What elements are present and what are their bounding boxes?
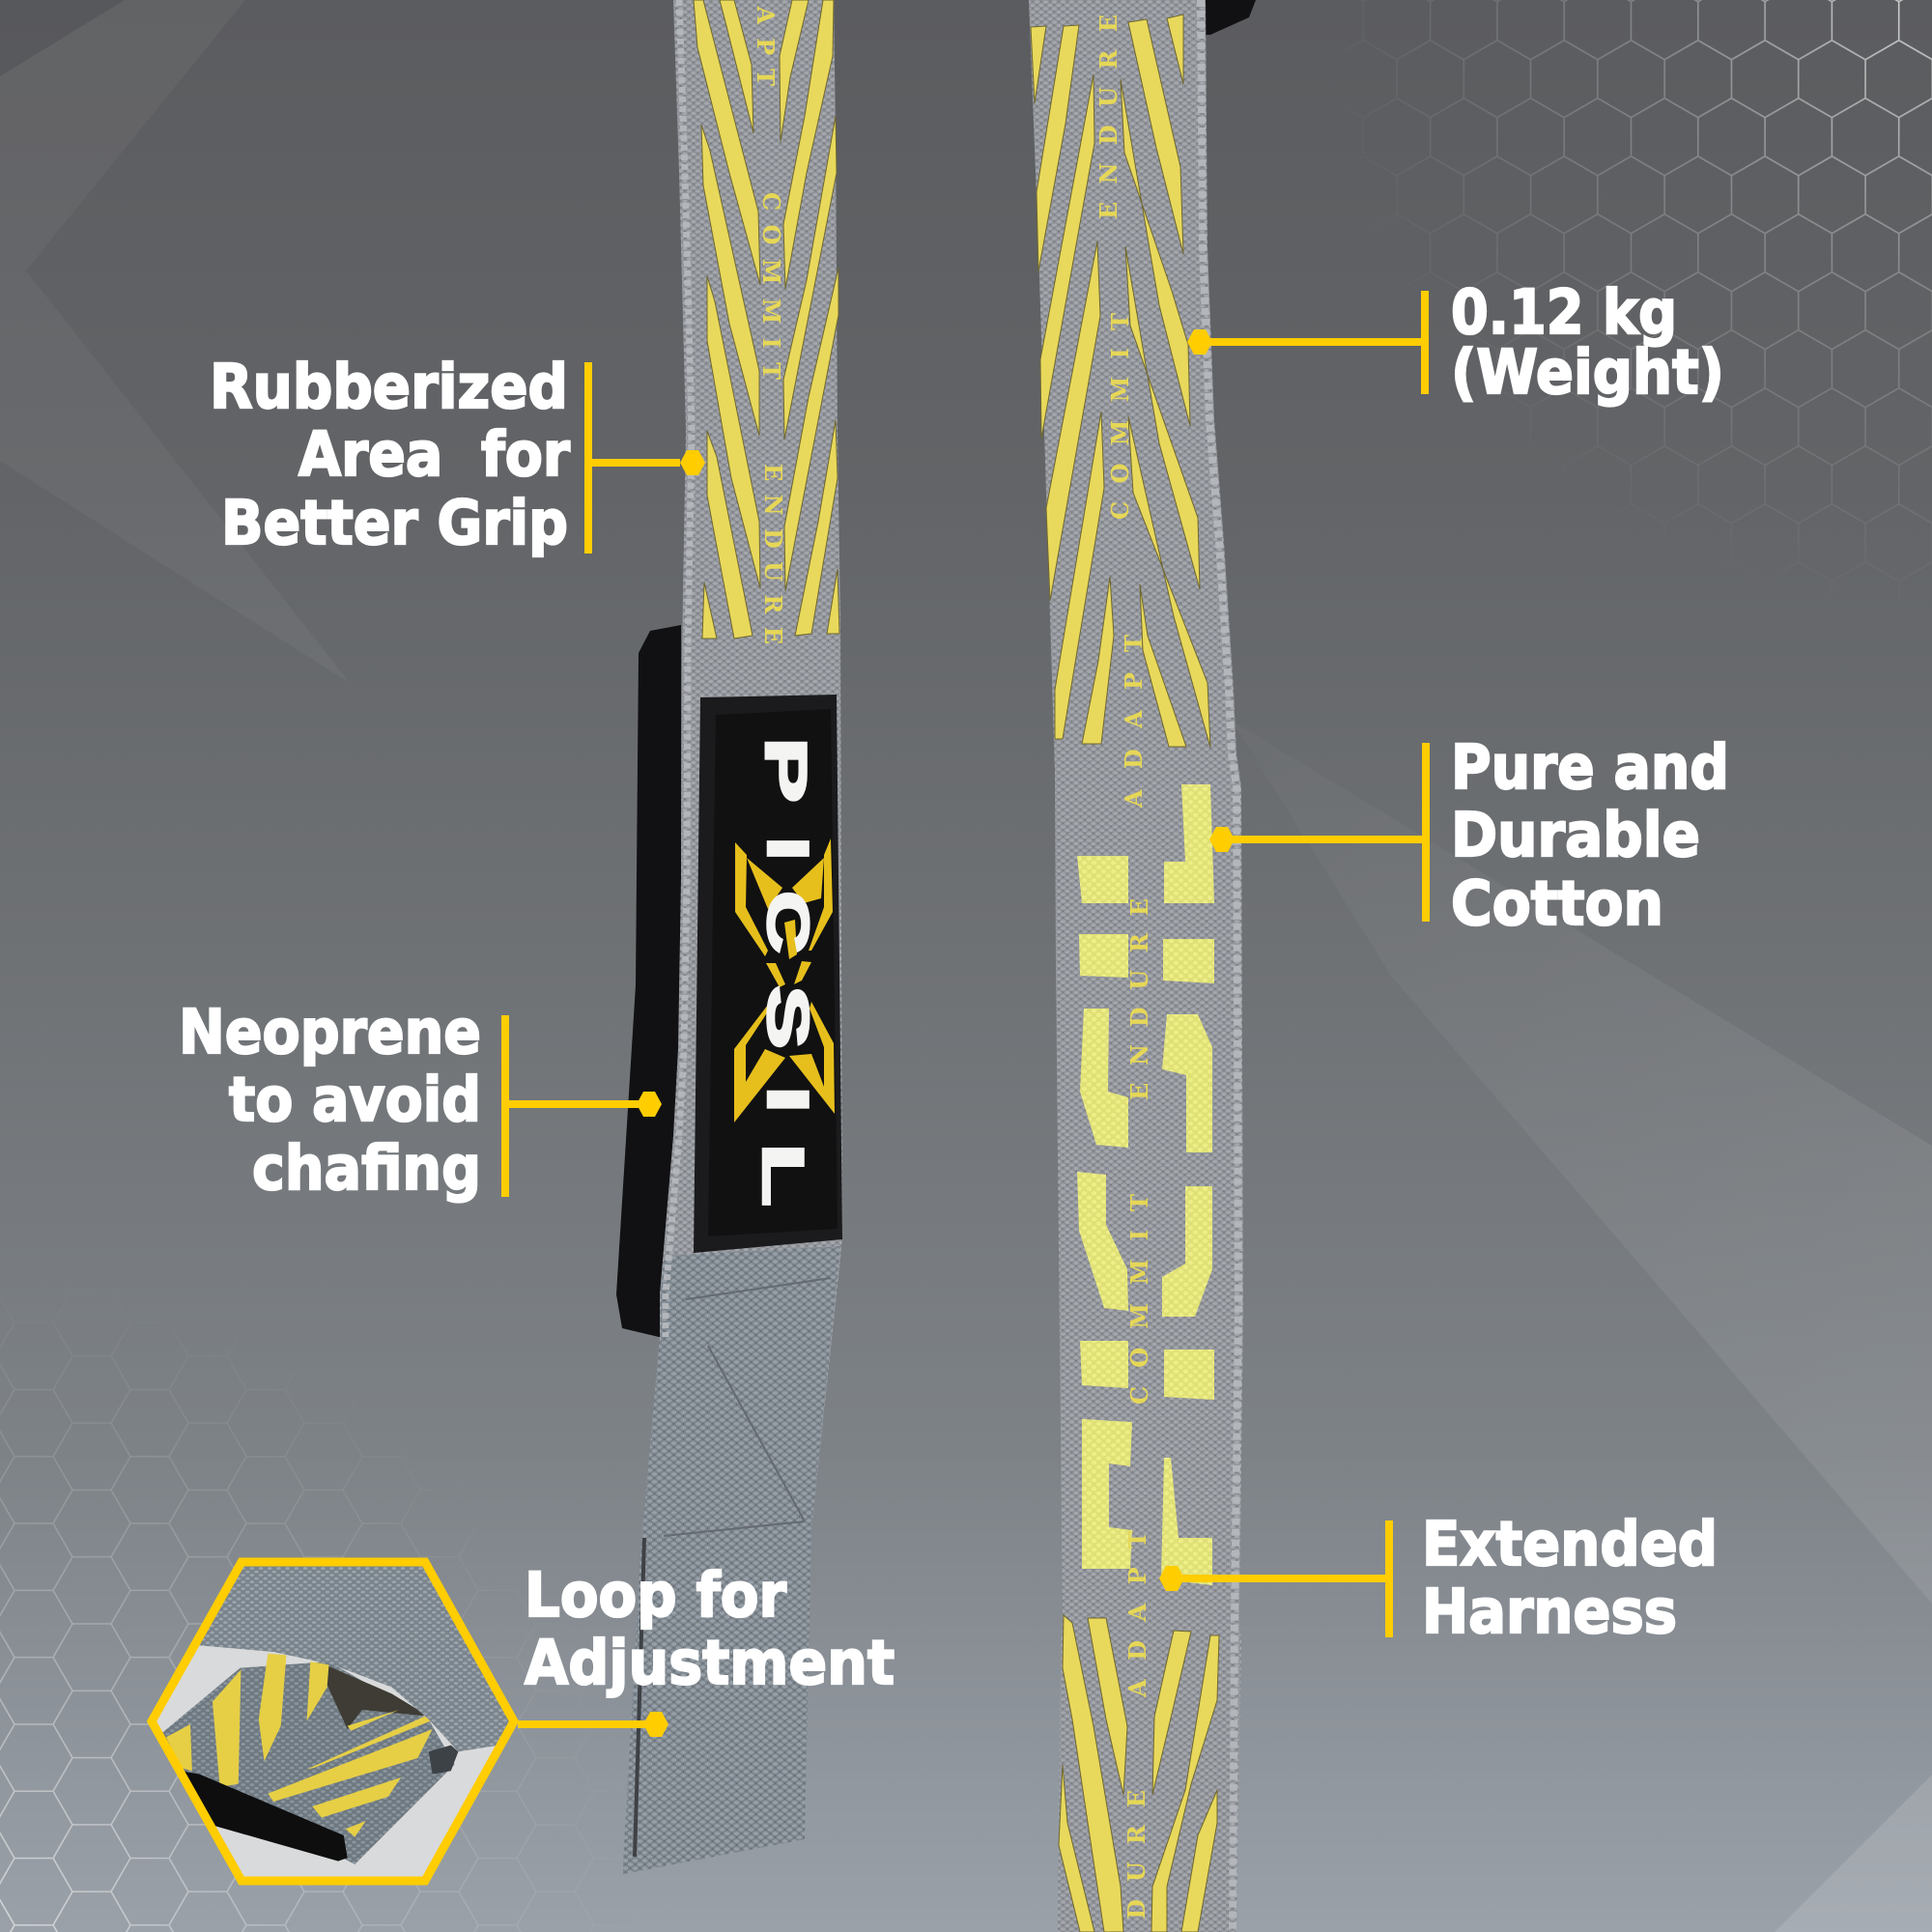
callout text	[1451, 277, 1724, 408]
callout text	[210, 352, 570, 558]
callout: rubberized area	[210, 352, 705, 558]
callout text: Harness	[1422, 1577, 1677, 1647]
neoprene tip	[1198, 0, 1256, 35]
callout text: Better Grip	[221, 488, 568, 558]
callout text: Rubberized	[210, 352, 568, 422]
inner folded strap	[158, 1662, 455, 1864]
callout text	[1422, 1509, 1718, 1647]
woven words, right strap: ENDURE	[1125, 898, 1153, 1100]
yellow stripes, right strap bottom	[1059, 1615, 1219, 1932]
woven brand letters, right strap	[1077, 784, 1214, 1585]
selvedge left strap	[666, 0, 692, 1337]
callout text	[179, 997, 481, 1204]
callout bracket and leader	[584, 362, 680, 554]
callout bracket and leader	[1175, 1520, 1393, 1637]
woven words, right strap: COMMIT	[1125, 1194, 1153, 1405]
callout text: to avoid	[229, 1065, 481, 1135]
left strap webbing	[623, 0, 842, 1874]
logo X mark	[734, 838, 835, 1122]
callout dot	[643, 1712, 668, 1737]
callout dot	[1159, 1566, 1184, 1591]
callout: pure cotton	[1209, 732, 1729, 939]
callout text: Neoprene	[179, 997, 481, 1067]
woven words, right strap: ENDURE	[1094, 14, 1122, 219]
logo letters: S	[755, 985, 820, 1049]
callout text: Adjustment	[525, 1628, 895, 1698]
callout: weight	[1187, 277, 1724, 408]
logo letters: C	[755, 891, 819, 953]
woven words, left strap: ENDURE	[759, 464, 787, 644]
callout leader	[518, 1720, 647, 1728]
yellow grip stripes, left strap	[694, 0, 839, 639]
callout dot	[637, 1092, 662, 1117]
selvedge right strap	[1201, 0, 1238, 1932]
callout text: (Weight)	[1451, 337, 1724, 408]
callout dot	[680, 450, 705, 475]
callout bracket and leader	[501, 1015, 639, 1197]
black neoprene edge	[181, 1771, 348, 1861]
callout bracket and leader	[1225, 743, 1430, 922]
grey top flap	[200, 1558, 518, 1751]
logo letters: I	[755, 1086, 820, 1113]
logo letters: L	[751, 1143, 815, 1207]
inset yellow stripes	[166, 1654, 433, 1837]
callout text: 0.12 kg	[1451, 277, 1677, 348]
callout text	[1451, 732, 1729, 939]
callout text: Durable	[1451, 800, 1700, 870]
logo letters: I	[755, 837, 819, 861]
woven words, left strap	[752, 0, 787, 644]
logo letters: P	[753, 737, 818, 803]
pocket shadow	[326, 1664, 429, 1729]
callout: extended harness	[1159, 1509, 1718, 1647]
callout text: Extended	[1422, 1509, 1718, 1579]
rubber logo patch	[694, 695, 842, 1253]
callout bracket and leader	[1204, 291, 1429, 394]
hexagon yellow frame	[152, 1562, 514, 1881]
callout dot	[1209, 827, 1235, 852]
strap stitching	[635, 1278, 831, 1857]
woven words, right strap: COMMIT	[1106, 313, 1134, 520]
woven words, right strap: ADAPT	[1123, 1531, 1151, 1698]
callout text: Area for	[298, 419, 570, 490]
woven words, right strap	[1094, 14, 1153, 1932]
yellow stripes, right strap top	[1031, 14, 1210, 748]
right strap webbing	[1029, 0, 1243, 1932]
callout text	[525, 1560, 895, 1698]
woven words, left strap: COMMIT	[757, 192, 785, 380]
callout text: chafing	[252, 1133, 481, 1204]
callout: neoprene	[179, 997, 662, 1204]
neoprene pad	[616, 625, 681, 1337]
logo letters	[751, 737, 820, 1207]
right strap	[1029, 0, 1256, 1932]
callout text: Pure and	[1451, 732, 1729, 803]
callout text: Cotton	[1451, 868, 1663, 939]
woven words, right strap: ADAPT	[1120, 635, 1148, 809]
callout dot	[1187, 329, 1212, 355]
callout: loop for adjustment	[518, 1560, 895, 1737]
hexagon inset: loop detail photo	[147, 1557, 518, 1886]
lower strap tail	[623, 1246, 840, 1874]
callout text: Loop for	[525, 1560, 786, 1631]
left strap with neoprene and rubber patch	[616, 0, 842, 1874]
